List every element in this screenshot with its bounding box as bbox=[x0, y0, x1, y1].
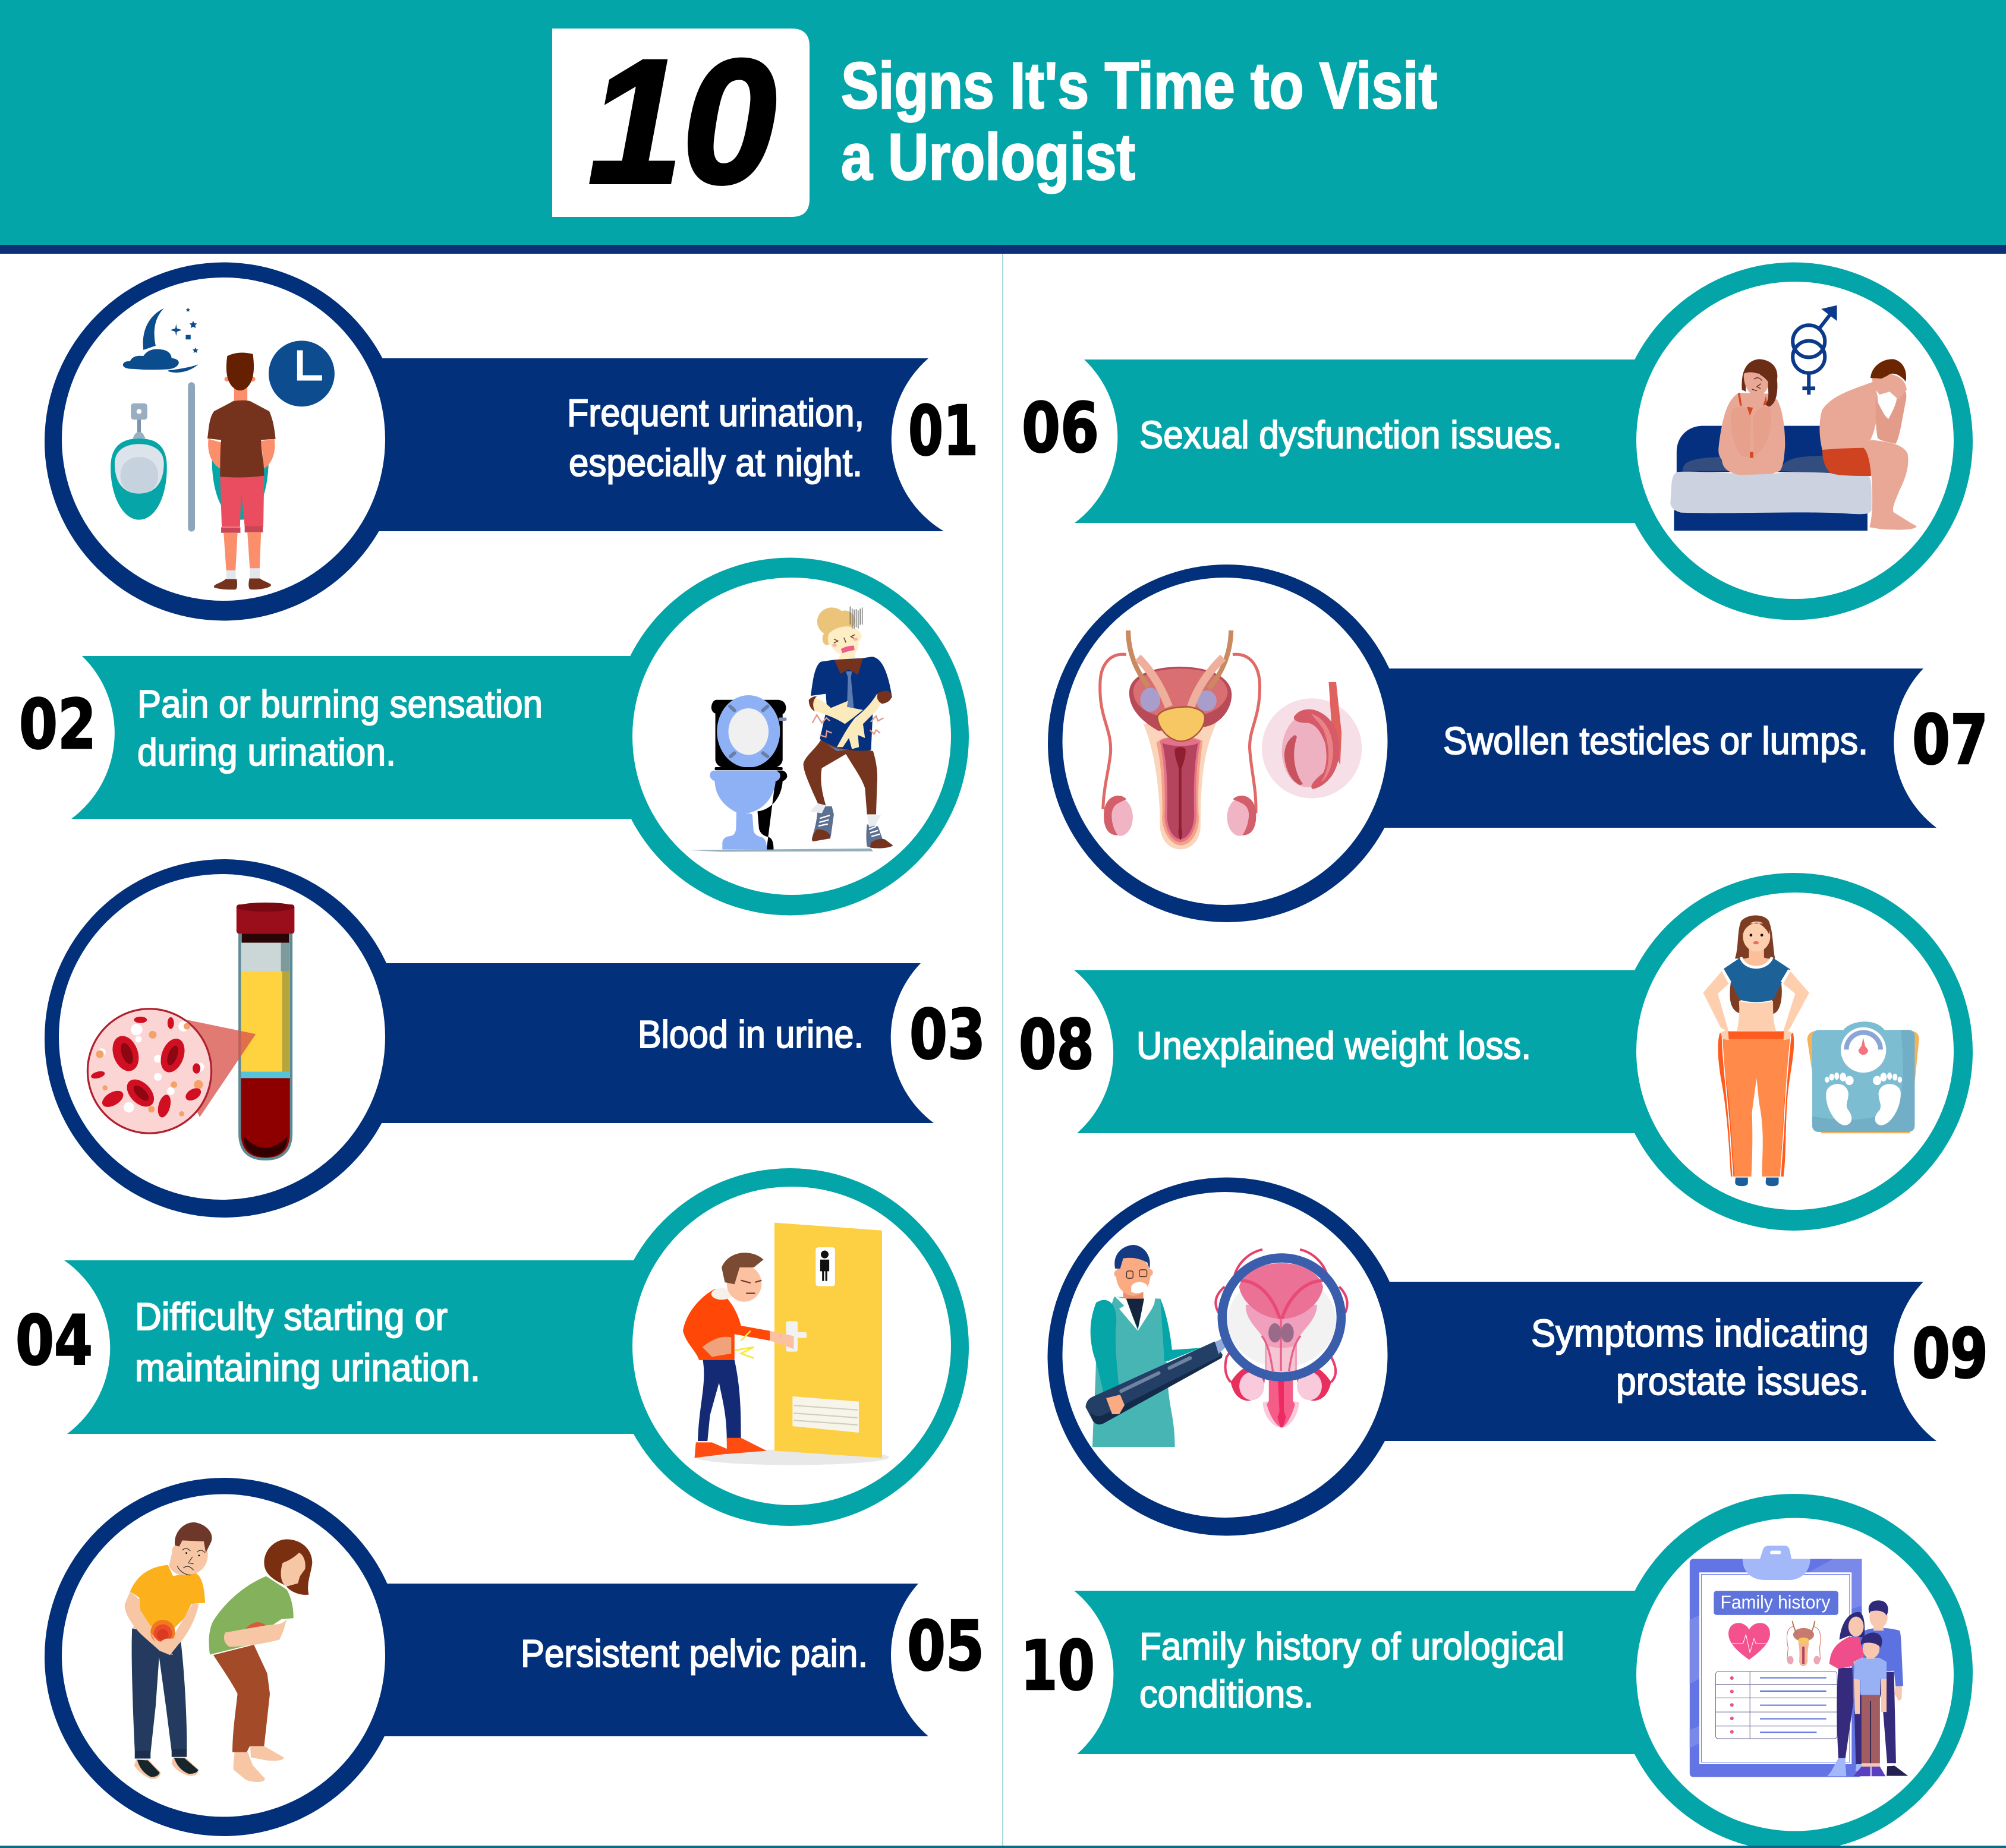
label text: prostate issues. bbox=[1616, 1360, 1869, 1403]
number 06: 06 bbox=[1022, 389, 1099, 468]
number box: 10 bbox=[588, 23, 776, 220]
label text: Frequent urination, bbox=[567, 391, 864, 434]
label text: Pain or burning sensation bbox=[137, 682, 543, 726]
label text bbox=[135, 1295, 480, 1389]
illustration: family history clipboard bbox=[1690, 1546, 1908, 1777]
label text: especially at night. bbox=[569, 441, 862, 484]
illustration: woman in loose pants with scale bbox=[1703, 916, 1919, 1186]
label text: conditions. bbox=[1139, 1672, 1314, 1715]
number 08: 08 bbox=[1019, 1005, 1094, 1085]
header banner bbox=[0, 0, 2006, 254]
label text: Blood in urine. bbox=[638, 1013, 864, 1056]
illustration: doctor with magnifier bbox=[1086, 1245, 1347, 1447]
label text: Symptoms indicating bbox=[1531, 1311, 1869, 1355]
label text bbox=[567, 391, 864, 484]
illustration: man at urinal at night bbox=[111, 308, 335, 589]
illustration: couple on bed bbox=[1670, 305, 1917, 531]
label text: Sexual dysfunction issues. bbox=[1139, 413, 1562, 456]
panel: sign 06 sexual dysfunction bbox=[1022, 263, 1973, 620]
title: a Urologist bbox=[841, 121, 1135, 194]
panel: sign 02 pain or burning bbox=[19, 557, 969, 915]
label text: maintaining urination. bbox=[135, 1346, 480, 1389]
illustration: male anatomy bbox=[1100, 630, 1362, 849]
panel: sign 01 frequent urination bbox=[45, 263, 978, 620]
label text: Persistent pelvic pain. bbox=[521, 1632, 868, 1675]
illustration: man in pain by toilet bbox=[687, 607, 893, 852]
illustration: man at restroom door bbox=[683, 1223, 889, 1465]
title bbox=[841, 49, 1437, 194]
label text bbox=[1139, 1625, 1564, 1715]
panel: sign 07 swollen testicles bbox=[1048, 565, 1988, 922]
panel: sign 08 weight loss bbox=[1019, 873, 1973, 1231]
panel: sign 05 pelvic pain bbox=[45, 1478, 984, 1836]
label text: Unexplained weight loss. bbox=[1136, 1024, 1531, 1067]
illustration: family history clipboard: Family history bbox=[1721, 1592, 1831, 1613]
label text bbox=[1531, 1311, 1869, 1403]
number 10: 10 bbox=[1021, 1626, 1095, 1706]
label text: Swollen testicles or lumps. bbox=[1443, 719, 1868, 762]
panel: sign 04 difficulty starting bbox=[15, 1168, 969, 1526]
illustration: man and woman with pelvic pain bbox=[125, 1522, 312, 1782]
number 09: 09 bbox=[1912, 1314, 1988, 1394]
number 01: 01 bbox=[908, 392, 978, 471]
title: Signs It's Time to Visit bbox=[841, 49, 1437, 122]
label text: Difficulty starting or bbox=[135, 1295, 448, 1338]
number 03: 03 bbox=[909, 995, 985, 1075]
illustration: test tube and blood cells bbox=[87, 903, 294, 1159]
number 04: 04 bbox=[15, 1301, 93, 1381]
number 02: 02 bbox=[19, 685, 96, 765]
label text bbox=[137, 682, 543, 774]
label text: Family history of urological bbox=[1139, 1625, 1564, 1668]
number 07: 07 bbox=[1912, 701, 1988, 780]
panel: sign 09 prostate issues bbox=[1047, 1178, 1988, 1535]
panel: sign 03 blood in urine bbox=[45, 859, 985, 1218]
panel: sign 10 family history bbox=[1021, 1494, 1973, 1848]
number 05: 05 bbox=[907, 1607, 984, 1686]
label text: during urination. bbox=[137, 730, 396, 774]
